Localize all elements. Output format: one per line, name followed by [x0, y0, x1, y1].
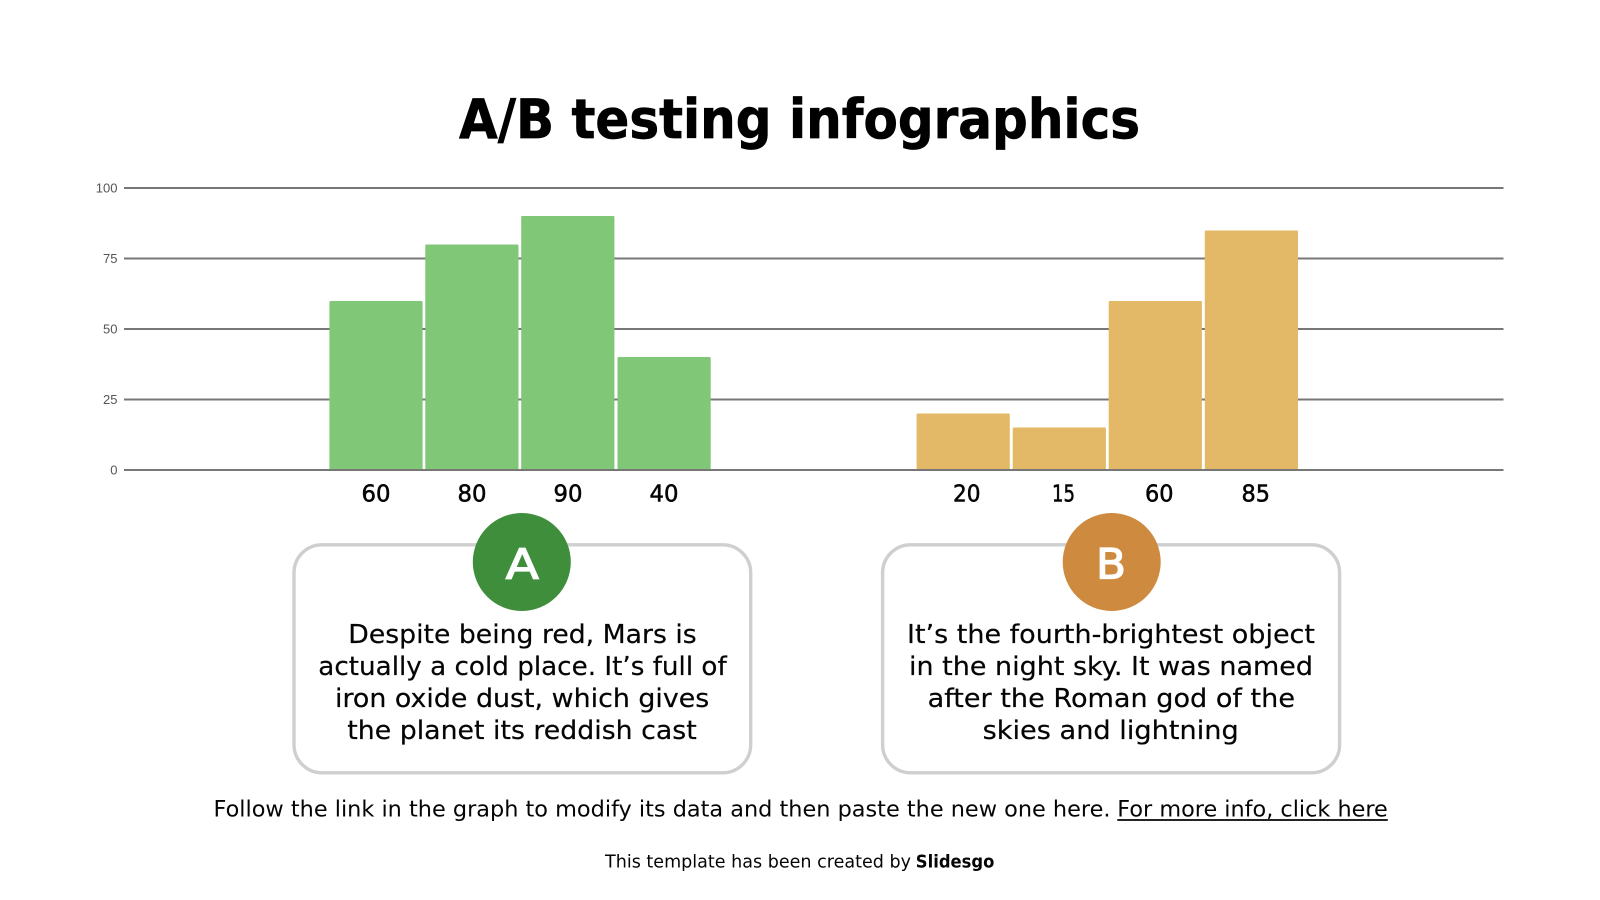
value labels: group B: 60	[1145, 482, 1174, 508]
value labels: group A	[362, 482, 678, 508]
value labels: group A: 60	[362, 482, 390, 508]
panel B text	[907, 620, 1315, 746]
panel A outline	[294, 545, 751, 773]
y-axis labels: 100	[96, 180, 118, 196]
y-axis labels: 75	[103, 251, 118, 266]
panel B text: skies and lightning	[983, 716, 1239, 746]
value labels: group B: 15	[1052, 482, 1075, 508]
value labels: group B	[953, 482, 1270, 508]
title: A/B testing infographics	[459, 88, 1140, 151]
value labels: group B: 85	[1242, 482, 1270, 508]
panel A text: Despite being red, Mars is	[348, 620, 697, 650]
panel A text: iron oxide dust, which gives	[335, 684, 709, 714]
panel B outline	[883, 545, 1340, 773]
bars: group B	[917, 230, 1298, 470]
panel: option B	[883, 513, 1340, 773]
y-axis labels: 0	[110, 462, 118, 478]
badge A: A	[506, 540, 539, 589]
panel B text: after the Roman god of the	[928, 684, 1295, 714]
link: For more info, click here	[1117, 796, 1388, 822]
value labels: group B: 20	[953, 482, 980, 508]
instruction line: Follow the link in the graph to modify its data and then paste the new one here.	[214, 796, 1110, 822]
value labels: group A: 40	[650, 482, 678, 508]
panel: option A	[294, 513, 751, 773]
value labels: group A: 80	[458, 482, 486, 508]
panel B text: in the night sky. It was named	[909, 652, 1313, 682]
badge B: B	[1096, 540, 1126, 588]
y-axis labels	[96, 180, 118, 478]
badge B	[1063, 513, 1161, 611]
footer credit: Slidesgo	[916, 852, 994, 872]
badge A	[473, 513, 571, 611]
panel A text: the planet its reddish cast	[347, 716, 697, 746]
y-axis labels: 25	[103, 392, 118, 407]
panel A text: actually a cold place. It’s full of	[318, 652, 728, 682]
panel A text	[318, 620, 728, 746]
bars: group A	[329, 216, 711, 470]
value labels: group A: 90	[554, 482, 582, 508]
panel B text: It’s the fourth-brightest object	[907, 620, 1315, 650]
footer credit: This template has been created by	[604, 852, 911, 872]
y-axis labels: 50	[103, 322, 118, 336]
bar chart	[96, 180, 1504, 508]
